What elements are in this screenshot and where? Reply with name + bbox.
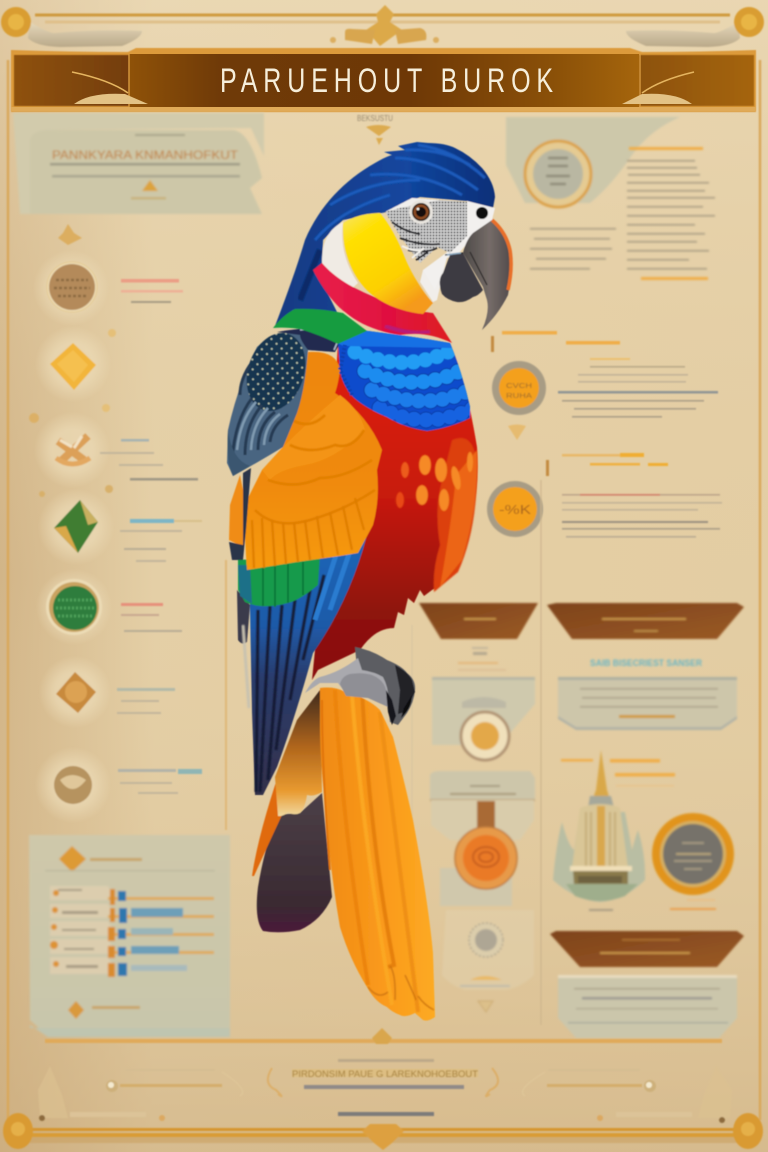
text block: right middle upper	[491, 331, 718, 440]
parrot: mid tail	[275, 690, 322, 816]
parrot: red collar	[313, 263, 452, 343]
icon: panel top diamond	[59, 846, 86, 872]
text block: right middle upper: CVCH	[506, 383, 532, 390]
seal: grey	[469, 923, 503, 957]
panel: top left heading	[13, 113, 264, 214]
parrot: upper beak	[445, 220, 512, 330]
medallion 3	[29, 404, 198, 497]
parrot: white beak base	[423, 201, 495, 290]
card: sage bottom	[558, 977, 737, 1038]
card: sage top	[558, 677, 737, 729]
text block: top right	[530, 147, 715, 280]
parrot: long orange tail	[320, 688, 435, 1021]
footer text: PIRDONSIM PAUE G LAREKNOHOEBOUT	[292, 1069, 479, 1079]
panel: top right seal	[506, 117, 680, 207]
heading: blue: SAIB BISECRIEST SANSER	[590, 658, 702, 668]
parrot: eye	[409, 200, 433, 224]
orange lines	[561, 759, 675, 787]
panel: top left heading: PANNKYARA KNMANHOFKUT	[52, 150, 238, 162]
parrot: white neck	[322, 222, 358, 292]
medallion: orange spiral	[455, 827, 517, 889]
medallion 6	[39, 656, 175, 728]
parrot: crest and nape	[275, 142, 495, 326]
text block: right middle upper: RUHA	[506, 393, 532, 400]
parrot: white throat	[420, 257, 447, 302]
parrot: left tail strip	[252, 770, 282, 876]
text block: right middle lower	[487, 453, 722, 538]
parrot: foot	[305, 647, 415, 725]
medallion 4	[38, 489, 202, 565]
bottom ornament rule	[45, 1028, 722, 1044]
icon: panel bottom diamond	[68, 1001, 84, 1019]
top scroll ornament	[1, 5, 764, 47]
illustration: parrot	[227, 142, 512, 1021]
parrot: lower left primary	[237, 590, 250, 644]
panel: right column	[547, 603, 744, 1038]
text block: right middle lower: -%K	[499, 502, 531, 517]
icon: top ornament	[58, 224, 82, 245]
banner: right top	[547, 603, 744, 639]
footer text	[38, 1059, 732, 1123]
medallion 5	[36, 569, 182, 645]
building illustration	[553, 750, 645, 902]
dividers	[412, 480, 541, 1025]
title banner	[11, 48, 756, 112]
panel: bottom left table	[29, 835, 230, 1037]
parrot: flight feathers	[243, 535, 367, 795]
medallion 1	[33, 250, 183, 326]
parrot: orange wing	[245, 352, 382, 570]
parrot: patterned face	[385, 198, 467, 263]
panel: sage card	[432, 677, 535, 745]
parrot: dark tail feather	[257, 793, 332, 932]
small label under banner	[357, 114, 393, 145]
parrot: covert feathers	[227, 325, 343, 476]
parrot: flame feathers	[396, 438, 477, 592]
medallion: gold seed	[461, 712, 509, 760]
parrot: nostril	[476, 207, 488, 219]
parrot: yellow cheek	[343, 213, 433, 314]
list: left column medallions	[29, 224, 202, 823]
bottom gold bar	[3, 1113, 763, 1150]
panel: middle column	[419, 603, 538, 1012]
parrot: neck band green	[273, 309, 367, 344]
medallion 7	[35, 747, 202, 823]
seal emblem	[525, 141, 591, 207]
parrot: blue chest	[338, 330, 474, 431]
medallion 2	[35, 326, 116, 402]
small label under banner: BEKSUSTU	[357, 114, 393, 123]
parrot: left orange edge	[229, 475, 245, 547]
parrot: green band	[238, 555, 320, 607]
banner: middle	[419, 603, 538, 639]
parrot: body	[312, 343, 478, 680]
medallion: grey badge	[652, 813, 734, 895]
title text: PARUEHOUT BUROK	[220, 62, 559, 100]
banner: right lower	[550, 931, 744, 967]
table rows	[50, 886, 214, 1019]
parrot: lower beak	[440, 253, 483, 302]
